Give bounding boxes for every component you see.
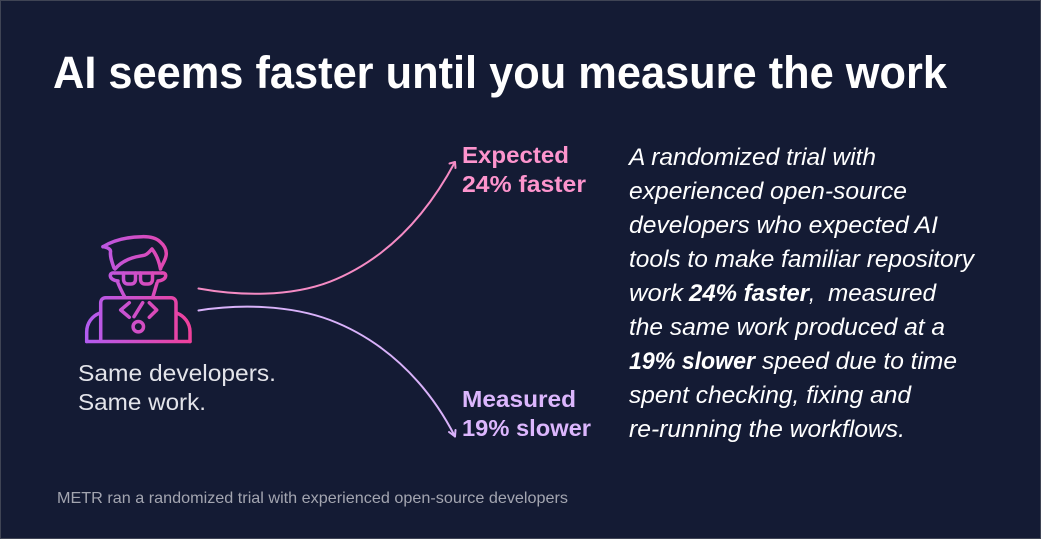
caption: same developers: Same developers.: [78, 360, 276, 386]
description text: tools to make familiar repository: [629, 246, 976, 273]
description text: ,: [809, 280, 815, 307]
arrow: measured: [198, 307, 456, 436]
caption: same developers: Same work.: [78, 389, 206, 415]
description text: spent checking, fixing and: [629, 382, 912, 409]
footnote: METR ran a randomized trial with experienced open-source developers: [57, 490, 568, 507]
title: AI seems faster until you measure the work: [53, 47, 948, 98]
description text: experienced open-source: [629, 178, 907, 205]
label: measured: [462, 386, 591, 441]
label: expected: [462, 142, 586, 197]
description text: speed due to time: [762, 348, 957, 375]
description text: 24% faster: [688, 280, 811, 307]
label: expected: Expected: [462, 142, 569, 168]
label: measured: 19% slower: [462, 415, 591, 441]
description text: [627, 144, 976, 443]
description text: A randomized trial with: [627, 144, 876, 171]
label: measured: Measured: [462, 386, 576, 412]
caption: same developers: [78, 360, 276, 415]
arrow: expected: [198, 162, 456, 294]
description text: 19% slower: [629, 348, 757, 375]
description text: work: [629, 280, 685, 307]
description text: measured: [828, 280, 937, 307]
label: expected: 24% faster: [462, 171, 586, 197]
description text: the same work produced at a: [629, 314, 945, 341]
description text: re-running the workflows.: [629, 416, 905, 443]
description text: developers who expected AI: [629, 212, 938, 239]
icon: developer with laptop: [87, 237, 190, 342]
